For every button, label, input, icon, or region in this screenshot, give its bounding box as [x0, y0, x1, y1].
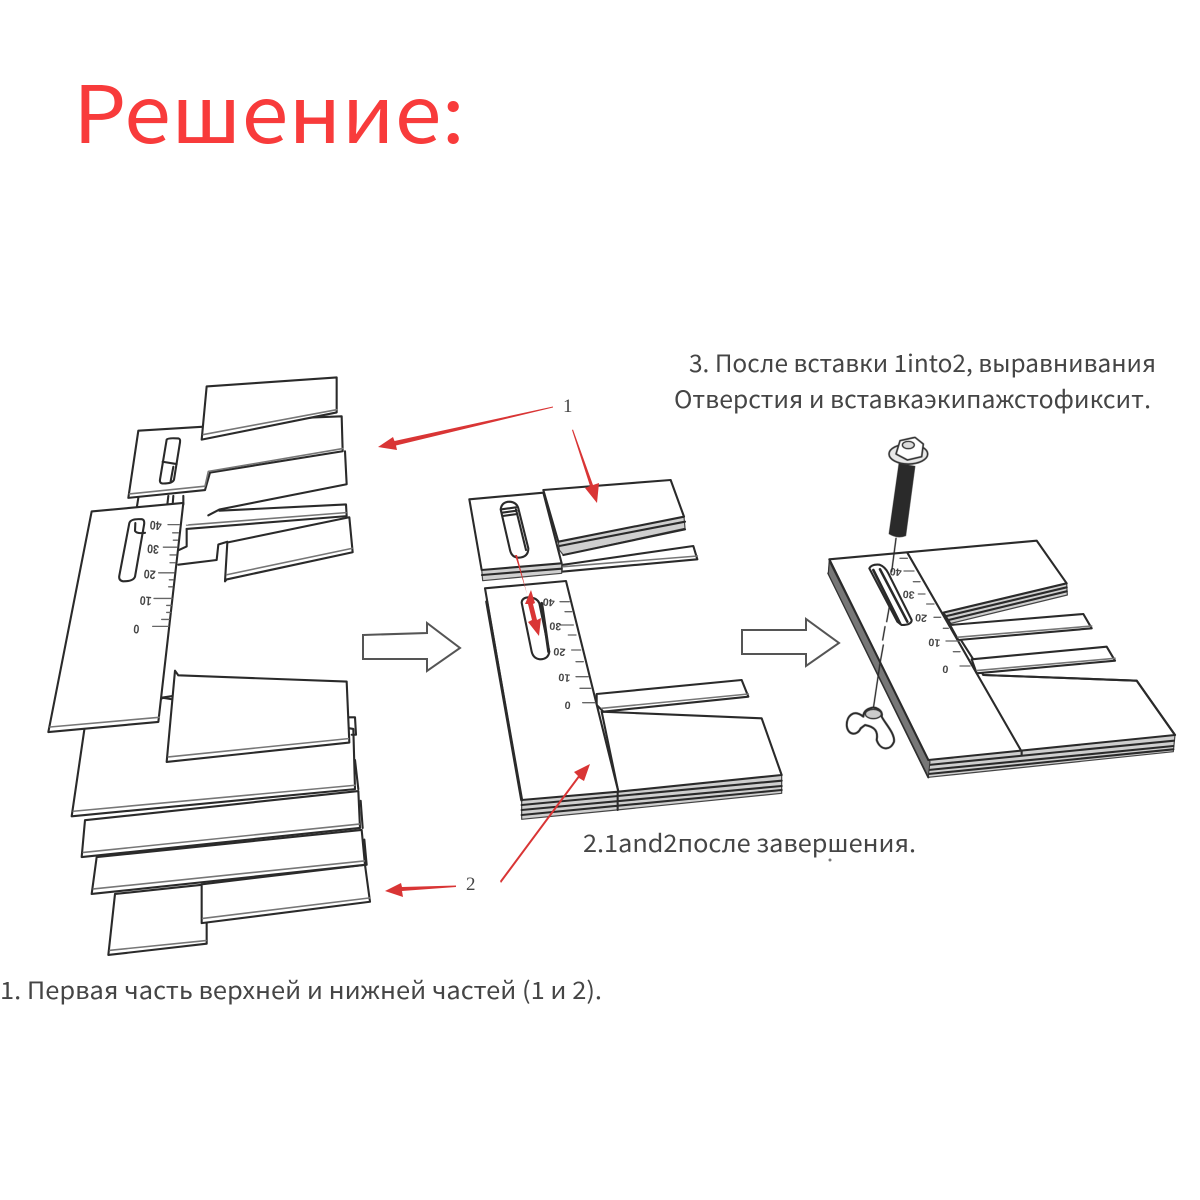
- arrow: step 2 to step 3: [742, 619, 839, 666]
- scale plate with slot and ruler: 0: [133, 621, 140, 635]
- scale plate with slot and ruler: 20: [143, 566, 156, 580]
- callout: label 2 with arrows: 2: [466, 874, 476, 895]
- scale square: 30: [549, 619, 562, 632]
- diagram: step 2 assembled parts: [469, 480, 782, 819]
- text: step 1 caption: 1. Первая часть верхней и нижней частей (1 и 2).: [0, 971, 602, 1006]
- layered block: 20: [915, 611, 927, 624]
- arrow: step 1 to step 2: [363, 623, 460, 671]
- scale square: 40: [542, 595, 555, 608]
- lower part layers: [72, 671, 370, 955]
- scale plate with slot and ruler: 30: [147, 541, 159, 555]
- layered block: [828, 541, 1175, 777]
- scale plate with slot and ruler: 40: [149, 517, 162, 531]
- scale plate with slot and ruler: [48, 503, 183, 732]
- layered block: 10: [928, 636, 941, 649]
- scale square: 0: [564, 698, 571, 711]
- upper part layers: [128, 377, 353, 581]
- text: step 2 caption: 2.1and2после завершения.: [583, 824, 916, 859]
- layered block: 0: [942, 662, 949, 675]
- scale square: 20: [553, 645, 566, 658]
- icon: bolt with thread: [873, 437, 928, 708]
- callout: label 1 with arrows: 1: [563, 396, 572, 417]
- arrow: bolt path in slot: [515, 555, 541, 636]
- callout: label 1 with arrows: [378, 396, 599, 503]
- callout: label 2 with arrows: [385, 764, 590, 897]
- scale plate with slot and ruler: 10: [139, 593, 152, 607]
- diagram: step 3 bolted assembly: [828, 437, 1175, 777]
- text: step 3 caption: 3. После вставки 1into2, выравнивания: [689, 344, 1156, 379]
- scale square: [485, 581, 782, 819]
- title: Решение:: [73, 51, 465, 166]
- text: step 3 caption: Отверстия и вставкаэкипажстофиксит.: [674, 380, 1151, 415]
- icon: wing nut: [847, 708, 894, 748]
- text: step 3 caption: [674, 344, 1156, 415]
- layered block: 40: [889, 565, 902, 578]
- diagram: step 1 exploded parts: [48, 377, 370, 955]
- upper assembly: [469, 480, 697, 581]
- layered block: 30: [902, 588, 915, 601]
- scale square: 10: [558, 671, 571, 684]
